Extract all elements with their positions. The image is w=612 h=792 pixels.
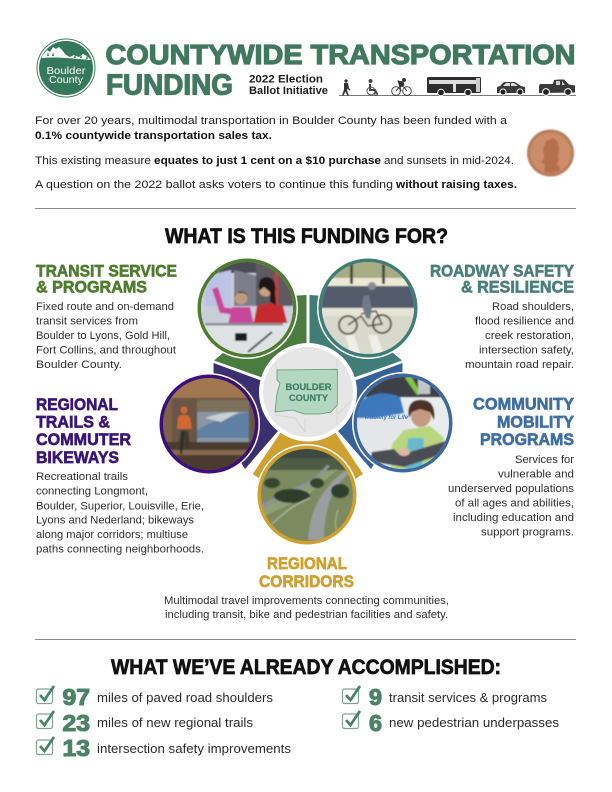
intro text — [35, 115, 517, 191]
panel: community mobility programs text: COMMUNITY — [473, 394, 575, 414]
item: 13 intersection safety improvements: 13 — [62, 735, 90, 761]
panel: transit service and programs text: Fixed route and on-demand — [36, 301, 174, 313]
panel: community mobility programs text: including education and — [453, 512, 574, 524]
subtitle: 2022 Election — [249, 74, 323, 86]
panel: roadway safety and resilience text: & RESILIENCE — [461, 278, 574, 296]
subtitle: Ballot Initiative — [249, 85, 328, 97]
panel: transit service and programs text: TRANSIT SERVICE — [36, 262, 177, 280]
photo: woman at a mobility van: Mobility for Life — [365, 414, 408, 421]
logo: Boulder County: Boulder — [46, 66, 86, 77]
item: 97 miles of paved road shoulders — [36, 684, 273, 710]
panel: roadway safety and resilience text — [430, 262, 575, 371]
segment: roadway (teal) — [310, 295, 402, 378]
intro text: 0.1% countywide transportation sales tax. — [35, 130, 272, 142]
item: 97 miles of paved road shoulders: miles of paved road shoulders — [97, 691, 273, 705]
panel: transit service and programs text — [36, 262, 177, 371]
panel: community mobility programs text: underserved populations — [448, 483, 575, 495]
intro text: This existing measure — [35, 155, 151, 167]
panel: regional trails and commuter bikeways text: paths connecting neighborhoods. — [36, 544, 204, 556]
panel: regional corridors text: REGIONAL — [267, 554, 347, 573]
center: Boulder County map: BOULDER — [286, 382, 332, 392]
panel: community mobility programs text: Services for — [515, 454, 574, 466]
icon: bus — [427, 77, 481, 96]
panel: transit service and programs text: Boulder County. — [36, 359, 122, 371]
icon: pickup truck — [539, 80, 575, 95]
panel: roadway safety and resilience text: creek restoration, — [485, 330, 574, 342]
icon: pedestrian — [342, 79, 350, 96]
segment: corridors (gold) — [253, 433, 363, 495]
title: COUNTYWIDE TRANSPORTATION — [106, 39, 576, 70]
item: 9 transit services and programs — [342, 684, 547, 710]
panel: regional trails and commuter bikeways text: Boulder, Superior, Louisville, Erie, — [36, 500, 204, 512]
panel: regional trails and commuter bikeways text: connecting Longmont, — [36, 486, 148, 498]
item: 6 new pedestrian underpasses: 6 — [369, 710, 382, 736]
panel: regional trails and commuter bikeways text: TRAILS & — [36, 412, 110, 432]
title — [106, 39, 576, 102]
item: 6 new pedestrian underpasses — [342, 710, 559, 736]
panel: community mobility programs text: vulnerable and — [498, 468, 574, 480]
photo: aerial view of a regional corridor — [256, 444, 358, 546]
subtitle — [249, 74, 328, 97]
panel: roadway safety and resilience text: ROADWAY SAFETY — [430, 262, 575, 280]
icon row: travel modes — [339, 77, 576, 96]
panel: regional trails and commuter bikeways text: BIKEWAYS — [36, 448, 119, 467]
icon: penny — [527, 130, 574, 176]
panel: transit service and programs text: Fort Collins, and throughout — [36, 344, 176, 356]
item: 9 transit services and programs: 9 — [369, 684, 382, 710]
panel: regional corridors text: CORRIDORS — [259, 572, 354, 591]
intro text: A question on the 2022 ballot asks voters to continue this funding — [35, 179, 393, 191]
panel: roadway safety and resilience text: mountain road repair. — [465, 359, 574, 371]
intro text: without raising taxes. — [395, 179, 517, 191]
panel: regional trails and commuter bikeways text: along major corridors; multiuse — [36, 529, 188, 541]
segment: trails (purple) — [214, 363, 278, 469]
segment: transit (green) — [214, 295, 306, 378]
panel: regional trails and commuter bikeways text: Recreational trails — [36, 471, 129, 483]
center: Boulder County map: COUNTY — [289, 393, 328, 403]
panel: roadway safety and resilience text: intersection safety, — [479, 344, 574, 356]
icon: car — [497, 82, 525, 95]
panel: transit service and programs text: transit services from — [36, 316, 138, 328]
panel: transit service and programs text: Boulder to Lyons, Gold Hill, — [36, 330, 170, 342]
heading: what is this funding for: WHAT IS THIS FUNDING FOR? — [165, 225, 448, 248]
panel: regional trails and commuter bikeways text: COMMUTER — [36, 430, 131, 449]
intro text: equates to just 1 cent on a $10 purchase — [154, 155, 381, 167]
item: 23 miles of new regional trails: miles of new regional trails — [97, 716, 253, 730]
item: 23 miles of new regional trails: 23 — [62, 710, 90, 736]
panel: regional trails and commuter bikeways text — [36, 395, 204, 556]
heading: what we've already accomplished: WHAT WE’VE ALREADY ACCOMPLISHED: — [111, 656, 501, 679]
panel: regional corridors text — [164, 554, 449, 621]
logo: Boulder County — [37, 39, 95, 97]
panel: community mobility programs text: of all ages and abilities, — [455, 498, 574, 510]
chart: five-segment ring around the county — [214, 295, 402, 495]
item: 23 miles of new regional trails — [36, 710, 253, 736]
item: 6 new pedestrian underpasses: new pedestrian underpasses — [389, 716, 559, 730]
list: accomplishments left column — [36, 684, 291, 761]
panel: roadway safety and resilience text: Road shoulders, — [492, 301, 574, 313]
item: 9 transit services and programs: transit services & programs — [389, 691, 547, 705]
panel: regional trails and commuter bikeways text: REGIONAL — [36, 395, 118, 414]
list: accomplishments right column — [342, 684, 559, 736]
photo: riders on a bus — [196, 257, 298, 359]
item: 13 intersection safety improvements: intersection safety improvements — [97, 742, 291, 756]
item: 13 intersection safety improvements — [36, 735, 291, 761]
segment: mobility (blue) — [338, 363, 402, 469]
panel: transit service and programs text: & PROGRAMS — [36, 278, 147, 296]
intro text: and sunsets in mid-2024. — [384, 155, 514, 167]
logo: Boulder County: County — [49, 75, 83, 86]
center: Boulder County map — [259, 343, 357, 441]
panel: regional corridors text: Multimodal travel improvements connecting communities, — [164, 595, 449, 607]
panel: community mobility programs text: MOBILITY — [497, 412, 575, 432]
item: 97 miles of paved road shoulders: 97 — [62, 684, 90, 710]
photo: cyclist in an underpass — [158, 373, 260, 475]
panel: regional trails and commuter bikeways text: Lyons and Nederland; bikeways — [36, 514, 194, 526]
panel: regional corridors text: including transit, bike and pedestrian facilities and safety. — [165, 609, 448, 621]
panel: community mobility programs text — [448, 394, 575, 538]
title: FUNDING — [106, 70, 233, 102]
intro text: For over 20 years, multimodal transportation in Boulder County has been funded with a — [35, 115, 508, 127]
panel: roadway safety and resilience text: flood resilience and — [475, 316, 574, 328]
panel: community mobility programs text: support programs. — [481, 526, 574, 538]
icon: cyclist — [392, 78, 411, 95]
panel: community mobility programs text: PROGRAMS — [480, 430, 574, 449]
icon: wheelchair — [367, 80, 377, 95]
photo: woman at a mobility van — [352, 372, 454, 474]
photo: child on a bicycle — [317, 257, 419, 359]
